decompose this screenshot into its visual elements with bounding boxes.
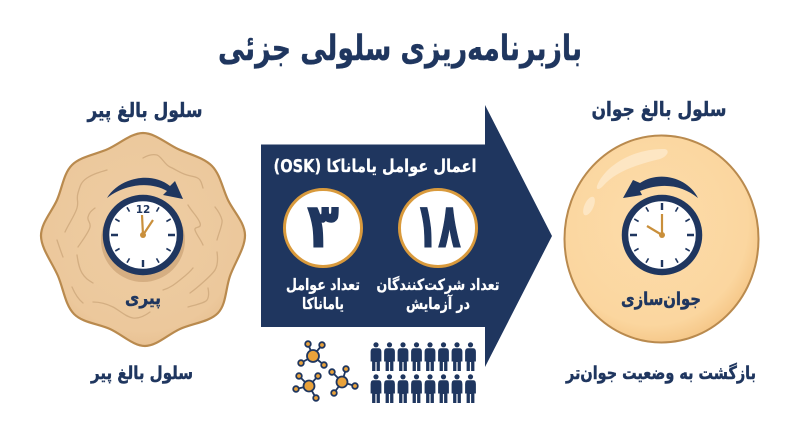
heading: young cell: سلول بالغ جوان: [592, 97, 726, 121]
label: ageing: پیری: [125, 288, 161, 309]
caption: young cell: بازگشت به وضعیت جوان‌تر: [565, 362, 756, 384]
stat: number of participants: [400, 189, 476, 266]
label: number of participants: در آزمایش: [406, 294, 470, 313]
icon: forward arrow: [107, 178, 183, 199]
arrow panel: OSK factors: [261, 105, 552, 367]
panel heading: اعمال عوامل یاماناکا (OSK): [274, 157, 476, 177]
caption: old cell: سلول بالغ پیر: [90, 363, 193, 384]
icon: clock, old cell: 12: [136, 204, 150, 216]
icon: clock, old cell: [101, 198, 185, 282]
panel: old cell: [41, 98, 245, 384]
label: number of factors: یاماناکا: [302, 295, 344, 313]
stat: number of factors: ۳: [307, 189, 339, 262]
title: بازبرنامه‌ریزی سلولی جزئی: [218, 29, 582, 69]
icon: molecules: [293, 341, 358, 401]
icon: cell wrinkles: [57, 155, 222, 318]
icon: participants: [371, 342, 476, 403]
heading: old cell: سلول بالغ پیر: [87, 98, 202, 123]
icon: wrinkled cell body: [41, 133, 245, 346]
label: number of factors: تعداد عوامل: [286, 276, 360, 294]
icon: clock, young cell: [625, 198, 699, 272]
icon: smooth cell body: [564, 136, 758, 342]
label: number of participants: تعداد شرکت‌کنندگان: [376, 275, 500, 294]
label: rejuvenation: جوان‌سازی: [621, 289, 701, 310]
stat: number of participants: ۱۸: [415, 189, 461, 262]
stat: number of factors: [284, 189, 362, 266]
icon: backward arrow: [623, 177, 698, 198]
label: number of participants: [376, 275, 500, 313]
label: number of factors: [286, 276, 360, 313]
icon: cell highlights: [597, 149, 668, 189]
arrow shape: [261, 105, 552, 367]
panel: young cell: [564, 97, 758, 384]
icon: small highlight: [581, 195, 597, 217]
